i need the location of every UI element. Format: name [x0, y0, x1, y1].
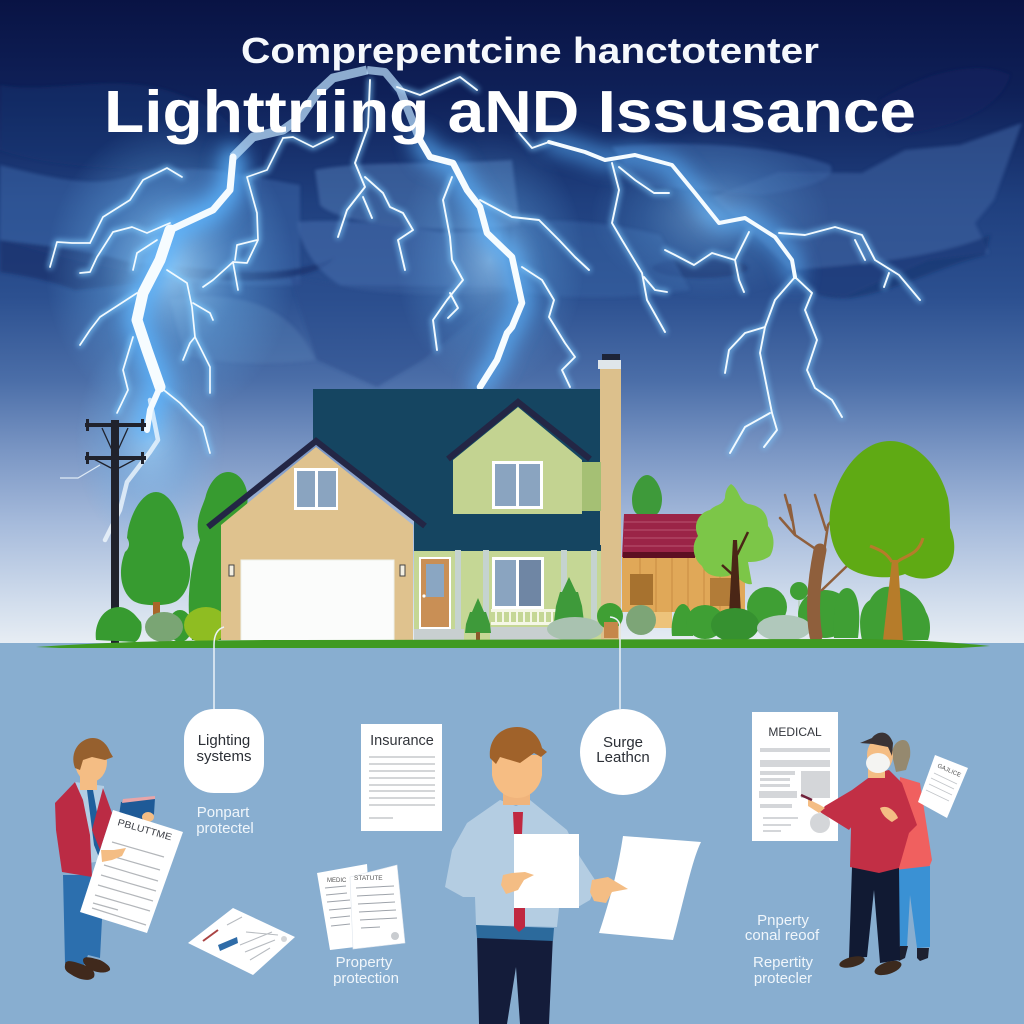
caption: property conal reoof [745, 912, 820, 944]
cone tree [121, 492, 190, 605]
belt [476, 925, 554, 941]
porch window [492, 557, 544, 609]
document: insurance: Insurance [370, 733, 434, 749]
porch steps [414, 629, 464, 640]
porch wall [414, 550, 601, 640]
main roof [313, 389, 600, 548]
woman head [892, 740, 910, 772]
title line 2: Lighttriing aND Issusance [104, 79, 916, 145]
woman [892, 740, 932, 961]
badge: surge [580, 709, 666, 795]
utility pole [85, 419, 146, 648]
shoes [65, 961, 95, 980]
grey shrub [145, 612, 183, 642]
face mask [866, 753, 890, 773]
man [801, 733, 917, 978]
porch columns [455, 550, 597, 630]
garage door [241, 560, 394, 641]
lime shrub [184, 607, 228, 643]
garage gable trim [208, 441, 425, 527]
caption: property conal reoof: Pnperty [757, 912, 809, 929]
badge: lighting systems: systems [196, 748, 252, 765]
upper gable trim [448, 402, 590, 459]
caption: property protection: protection [333, 970, 399, 987]
document: insurance [361, 724, 442, 831]
document pair: STATUTE [354, 875, 383, 882]
sweater [850, 770, 917, 873]
neighbouring cabin [622, 475, 745, 628]
lightning: centre bolt [338, 70, 589, 387]
badge: surge: Leathcn [596, 749, 650, 766]
person: central man with papers [445, 727, 701, 1024]
leafy tree [694, 484, 774, 632]
chimney [598, 354, 621, 641]
sleeve [820, 790, 852, 830]
caption: property protected: Ponpart [197, 804, 250, 821]
jacket [55, 782, 92, 877]
tall tree behind garage [189, 472, 248, 640]
legs [63, 875, 103, 965]
document pair: MEDIC [327, 878, 347, 884]
left shrub [96, 607, 142, 642]
caption: property protected: protectel [196, 820, 254, 837]
hand [142, 812, 154, 822]
caption: reperty protecler [753, 954, 814, 987]
woman jeans [895, 866, 930, 948]
held document: PBLUTTME [116, 817, 173, 843]
porch railing [491, 609, 561, 625]
bare tree [780, 495, 848, 636]
person: left man with policy [55, 738, 183, 980]
garage window [294, 468, 338, 510]
badge: surge: Surge [603, 734, 643, 751]
connector: lighting systems [214, 627, 224, 710]
storm clouds [0, 68, 1022, 387]
shoes [838, 954, 866, 970]
document pair [317, 864, 405, 950]
small document [918, 755, 968, 818]
garage wing wall [221, 447, 413, 640]
small document: GAJLICE [936, 763, 961, 779]
left paper [514, 834, 579, 908]
document: medical [752, 712, 838, 841]
wall lamps [229, 565, 405, 576]
upper gable wall [453, 407, 582, 514]
woman top [895, 777, 932, 872]
hands [501, 872, 534, 894]
upper window [492, 461, 543, 509]
badge: lighting systems [184, 709, 264, 793]
lawn [36, 639, 990, 648]
trousers [477, 935, 553, 1024]
shirt [445, 800, 597, 927]
caption: property conal reoof: conal reoof [745, 927, 820, 944]
lightning halos [45, 120, 830, 550]
front shrubs [465, 577, 584, 633]
cone tree trunk [153, 602, 160, 618]
tie [513, 812, 523, 834]
shirt and tie [75, 782, 106, 865]
couple [801, 733, 968, 978]
large green tree [830, 441, 954, 640]
caption: property protection: Property [336, 954, 393, 971]
pointing hand [101, 848, 126, 862]
house [208, 354, 621, 641]
caption: reperty protecler: Repertity [753, 954, 814, 971]
hand and pen [808, 799, 825, 813]
caption: reperty protecler: protecler [754, 970, 812, 987]
lower panel background [0, 643, 1024, 1024]
hair [73, 738, 113, 770]
lightning: left bolt [50, 70, 367, 540]
held document [80, 810, 183, 933]
document: medical: MEDICAL [768, 725, 822, 739]
neck and face [503, 785, 530, 805]
hand on chest [880, 807, 898, 822]
hair and cap [490, 727, 547, 764]
connector: surge [610, 617, 620, 709]
woman shoes [896, 946, 929, 961]
caption: property protected [196, 804, 254, 837]
lightning: right bolt [519, 133, 920, 453]
neck and head [80, 773, 97, 790]
badge: lighting systems: Lighting [198, 732, 250, 749]
neck and head [868, 762, 885, 778]
title line 1: Comprepentcine hanctotenter [241, 30, 819, 71]
document: tilted form on floor [188, 908, 295, 975]
door [419, 557, 451, 629]
cap [860, 733, 893, 756]
trousers [849, 867, 900, 963]
trees left of house [96, 472, 248, 643]
stormy sky background [0, 0, 1024, 645]
book [119, 798, 155, 826]
caption: property protection [333, 954, 399, 987]
title [104, 30, 916, 145]
right paper [599, 836, 701, 940]
garden trees and shrubs [465, 441, 954, 642]
